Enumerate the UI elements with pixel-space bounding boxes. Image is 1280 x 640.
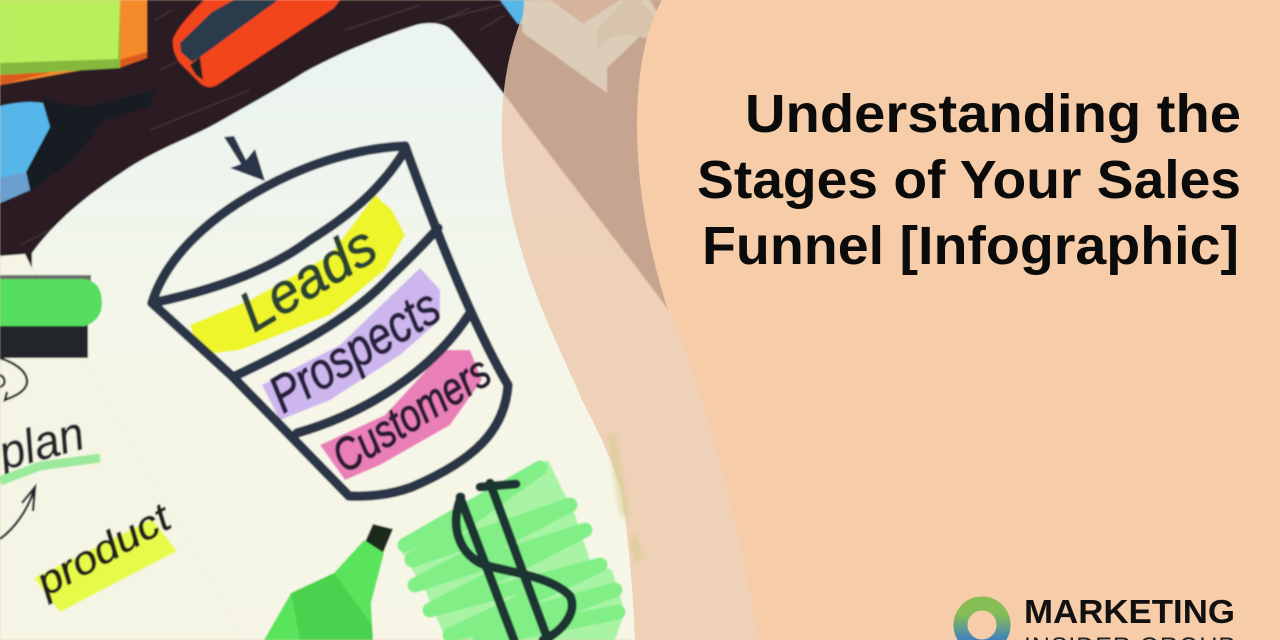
product highlight <box>34 519 177 612</box>
plan underline <box>0 458 100 481</box>
title <box>697 84 1241 276</box>
prospects highlight <box>262 268 440 420</box>
logo: Marketing Insider Group <box>960 593 1235 640</box>
blue marker at top <box>500 0 530 24</box>
scribble base fill <box>397 460 625 640</box>
green highlighter <box>264 524 393 640</box>
customers highlight <box>320 350 482 480</box>
sticky notes <box>0 0 147 85</box>
solid peach panel <box>637 0 1280 640</box>
green marker on left page <box>0 275 102 358</box>
green scribble <box>397 460 625 640</box>
label: Customers: Customers <box>323 345 500 482</box>
sketch arrow <box>0 487 35 539</box>
label: Leads: Leads <box>228 213 387 343</box>
translucent peach overlay <box>502 0 800 640</box>
small arrow above funnel <box>224 136 265 181</box>
label: Prospects: Prospects <box>259 278 450 424</box>
white object at top <box>522 0 660 93</box>
orange marker cap <box>173 0 340 87</box>
leads highlight <box>190 195 405 355</box>
dollar sign sketch <box>456 483 572 640</box>
title: Understanding the <box>745 84 1241 144</box>
funnel outline <box>152 146 508 496</box>
logo wordmark: MARKETING <box>1024 593 1235 630</box>
blue marker <box>0 90 156 203</box>
wood desk background <box>0 0 720 340</box>
notebook right page <box>32 23 800 640</box>
panel: funnel <box>152 146 508 496</box>
scribble strokes <box>405 468 618 640</box>
label: product: product <box>28 495 180 605</box>
title: Funnel [Infographic] <box>702 216 1239 276</box>
logo ring icon <box>960 604 1004 640</box>
panel: desk photo <box>0 0 800 640</box>
notebook left page <box>0 254 247 640</box>
title: Stages of Your Sales <box>697 150 1241 210</box>
sketch on left page: bulb <box>0 358 27 400</box>
faint marks under overlay <box>607 433 645 565</box>
